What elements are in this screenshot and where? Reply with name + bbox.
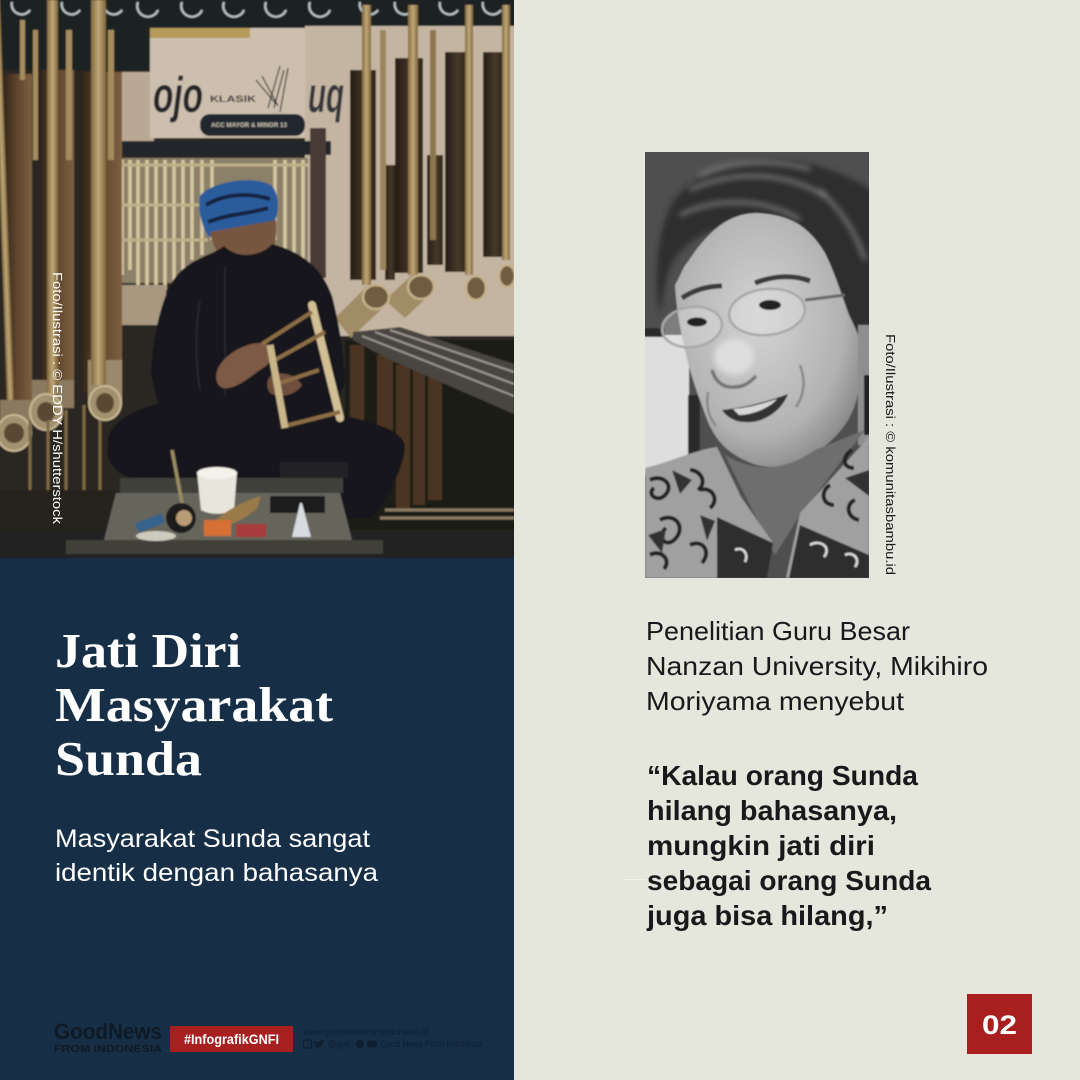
photo: angklung craftsman: ojo [153, 67, 203, 123]
intro text: Penelitian Guru Besar [646, 616, 910, 646]
photo: angklung craftsman [0, 0, 535, 580]
footer logo: GoodNews From Indonesia [54, 1019, 162, 1055]
batik shirt [645, 437, 869, 578]
quote: juga bisa hilang,” [646, 900, 888, 931]
title: Masyarakat [55, 677, 334, 732]
man: hands and angklung [216, 343, 273, 388]
title [55, 623, 334, 786]
neck [725, 430, 865, 555]
subtitle: Masyarakat Sunda sangat [55, 825, 370, 853]
left tubes [4, 74, 32, 419]
photo: angklung craftsman: ACC MAYOR & MINOR 13 [211, 122, 287, 129]
quote: mungkin jati diri [647, 830, 875, 861]
portrait photo credit: Foto/Ilustrasi : © komunitasbambu.id [883, 334, 897, 575]
low rack left [28, 404, 102, 491]
eyes [687, 318, 707, 326]
panel: navy title block [0, 558, 514, 1080]
title: Sunda [55, 731, 202, 786]
eyebrows [682, 277, 810, 298]
right tubes [350, 70, 376, 280]
intro text [646, 616, 988, 716]
footer logo: GoodNews From Indonesia: FROM INDONESIA [54, 1044, 162, 1055]
photo: angklung craftsman: KLASIK [210, 94, 257, 104]
subtitle: identik dengan bahasanya [55, 859, 378, 887]
floor [27, 490, 115, 506]
photo: portrait of Mikihiro Moriyama [645, 152, 869, 578]
cardboard boxes [305, 26, 534, 336]
ear side [858, 325, 870, 445]
hanging rack [118, 158, 308, 283]
footer contact line: Good News From Indonesia [380, 1039, 483, 1050]
hashtag tag: #InfografikGNFI [184, 1032, 279, 1047]
man: body [108, 244, 405, 518]
title: Jati Diri [55, 623, 241, 678]
white pot [197, 472, 237, 514]
intro text: Moriyama menyebut [646, 686, 905, 716]
footer contact line [302, 1027, 483, 1050]
shelf bar [118, 141, 331, 155]
hooks row [12, 2, 501, 17]
footer contact line: @gnfi [328, 1039, 350, 1050]
subtitle [55, 825, 378, 887]
quote [646, 760, 931, 931]
hashtag tag [170, 1026, 293, 1052]
mouth [722, 394, 788, 422]
man: face [209, 219, 278, 256]
hair [655, 158, 869, 332]
glasses [660, 285, 807, 351]
quote: hilang bahasanya, [647, 795, 897, 826]
photo: angklung craftsman: uq [308, 67, 344, 123]
page number badge [967, 994, 1032, 1054]
intro text: Nanzan University, Mikihiro [646, 651, 988, 681]
tube mouths [0, 386, 121, 451]
quote: “Kalau orang Sunda [647, 760, 918, 791]
photo credit: Foto/Ilustrasi : © EDDY H/shutterstock [50, 272, 64, 525]
workbench [120, 478, 343, 493]
quote: sebagai orang Sunda [647, 865, 931, 896]
footer contact line: www.goodnewsfromindonesia.id [302, 1027, 429, 1038]
nose [714, 339, 754, 375]
backdrop light panel [645, 334, 690, 476]
page number badge: 02 [982, 1010, 1017, 1040]
man: turban [199, 180, 278, 238]
mid post [310, 128, 326, 278]
footer logo: GoodNews From Indonesia: GoodNews [54, 1019, 162, 1044]
gambang instrument [345, 340, 514, 530]
face [675, 213, 862, 467]
right tube mouths [335, 274, 433, 338]
